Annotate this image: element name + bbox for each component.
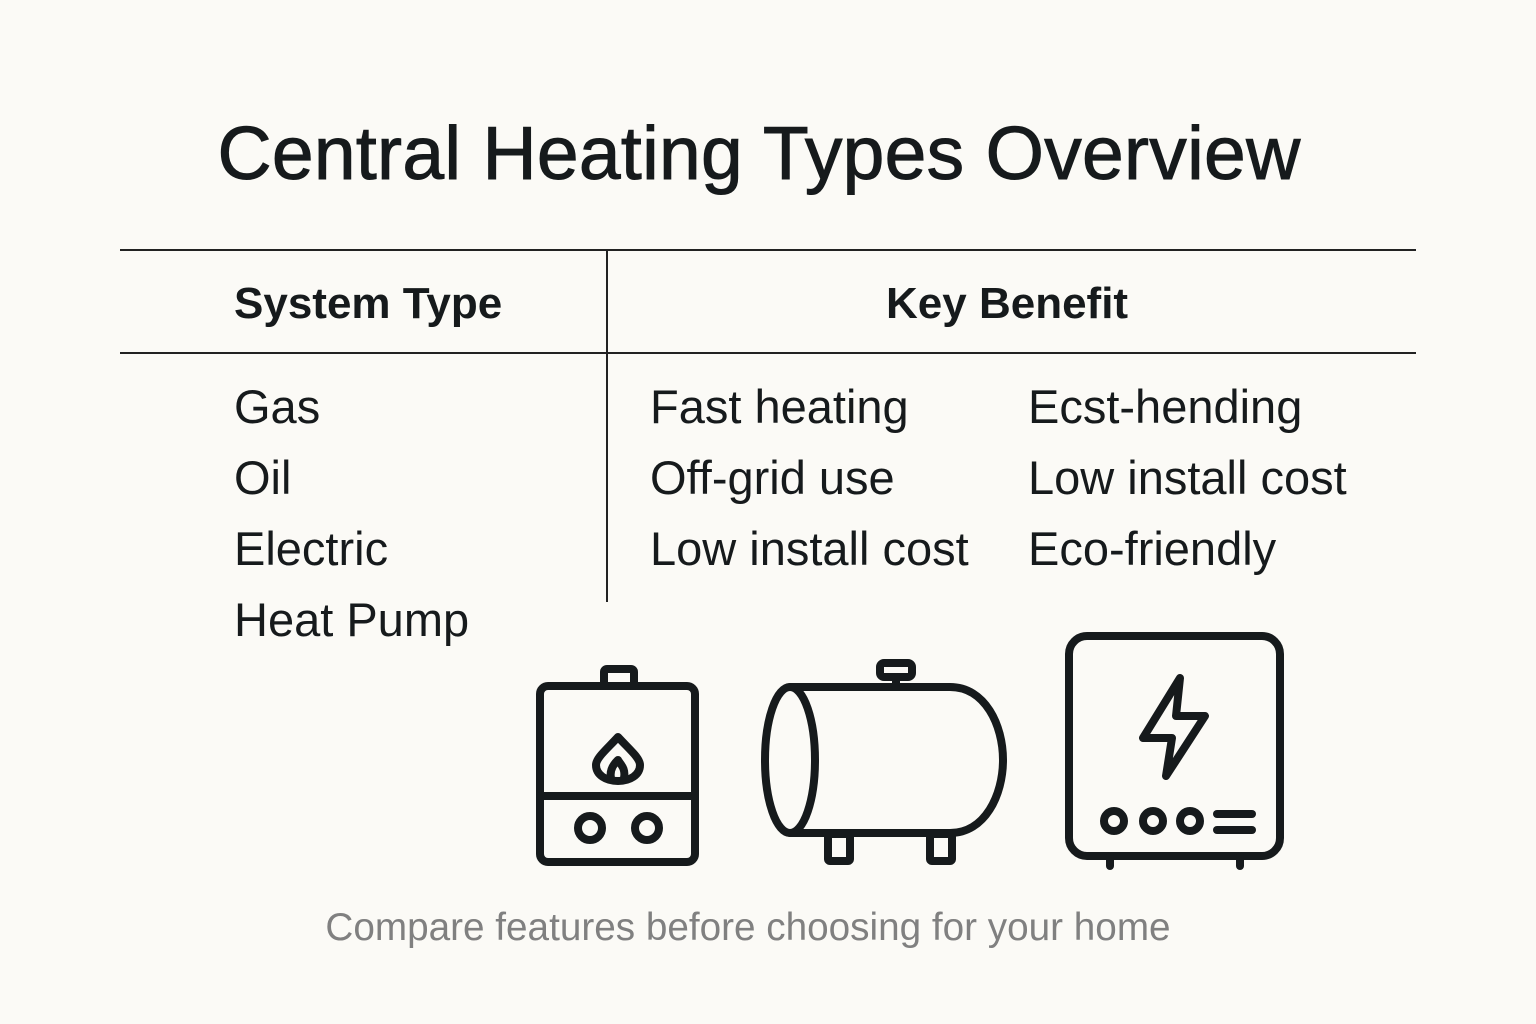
benefits column 2: Low install cost [1028,451,1347,504]
header: system type: System Type [234,279,502,328]
benefits column 2: Ecst-hending [1028,380,1302,433]
benefits column 1 [650,380,969,575]
benefits column 1: Fast heating [650,380,909,433]
header: key benefit: Key Benefit [886,279,1128,328]
footer caption: Compare features before choosing for your home [325,906,1171,949]
title: Central Heating Types Overview [217,111,1301,195]
benefits column 2: Eco-friendly [1028,522,1276,575]
system types column [234,380,469,646]
system types column: Gas [234,380,320,433]
system types column: Heat Pump [234,593,469,646]
icon: gas boiler [540,669,695,862]
icon: electric heater [1069,636,1280,866]
system types column: Oil [234,451,291,504]
icon: oil tank [765,663,1003,861]
benefits column 1: Off-grid use [650,451,895,504]
table [120,249,1416,646]
system types column: Electric [234,522,388,575]
benefits column 1: Low install cost [650,522,969,575]
benefits column 2 [1028,380,1347,575]
